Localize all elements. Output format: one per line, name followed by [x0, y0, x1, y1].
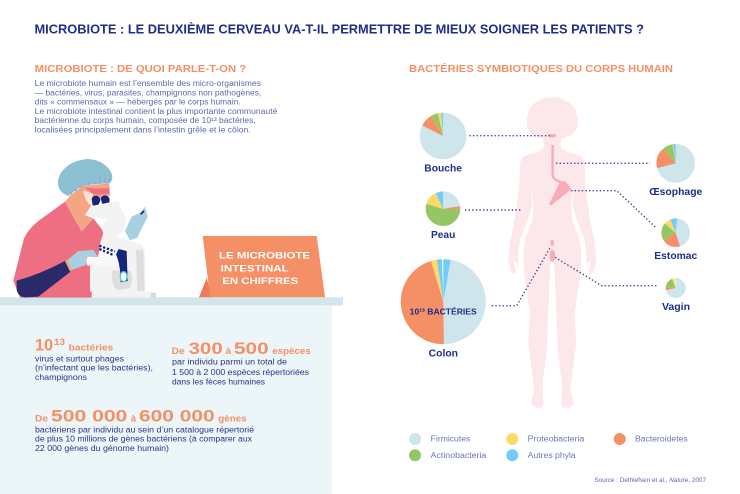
stat: 500 000 à 600 000 gènes: De: [35, 414, 48, 425]
panel: chiffres background: [0, 305, 332, 494]
pie: estomac: [669, 226, 683, 240]
pipette: [141, 211, 144, 214]
stat: 500 000 à 600 000 gènes: 500 000: [51, 407, 127, 426]
microscope arm: [116, 249, 128, 282]
connector: oesophage: [556, 162, 650, 164]
label: vagin: Vagin: [662, 302, 690, 313]
legend: Actinobacteria: [431, 451, 487, 460]
connector: bouche: [469, 135, 550, 137]
stat: 500 000 à 600 000 gènes: 22 000 gènes du génome humain): [35, 444, 169, 453]
stat: 300 à 500 espèces: 500: [234, 339, 269, 358]
colon annotation: 10¹³ BACTÉRIES: [410, 307, 477, 317]
label: bouche: Bouche: [424, 164, 462, 175]
sign: le microbiote en chiffres: EN CHIFFRES: [222, 276, 298, 287]
sign: le microbiote en chiffres: [199, 236, 325, 297]
surgical cap: [58, 159, 112, 196]
stat: 10^13 bactéries: 13: [54, 337, 65, 348]
pie: vagin: [671, 283, 681, 293]
text block: introduction: bactérienne du corps humain, composée de 10¹³ bactéries,: [35, 116, 256, 125]
neck and face: [65, 183, 110, 232]
pie: oesophage: [666, 154, 685, 173]
stat: 300 à 500 espèces: De: [172, 346, 185, 357]
scrubs: [13, 202, 105, 298]
stat: 10^13 bactéries: [35, 336, 153, 382]
cap gathers: [70, 177, 109, 194]
objectives: [99, 246, 115, 255]
sleeve: [17, 261, 71, 297]
stat: 300 à 500 espèces: 1 500 à 2 000 espèces répertoriées: [172, 368, 309, 377]
goggles strap: [85, 188, 109, 195]
stat: 10^13 bactéries: champignons: [35, 373, 87, 382]
label: oesophage: Œsophage: [649, 187, 703, 198]
microscope base: [92, 292, 151, 298]
pie: colon: [422, 280, 465, 323]
connector: estomac: [571, 191, 657, 228]
stat: 10^13 bactéries: (n’infectant que les bactéries),: [35, 364, 153, 373]
stat: 300 à 500 espèces: dans les fèces humaines: [172, 377, 265, 386]
legend: Firmicutes: [431, 435, 470, 444]
text block: introduction: dits « commensaux » — hébergés par le corps humain.: [35, 98, 241, 106]
glove upper: [125, 207, 148, 240]
legend: [409, 433, 688, 461]
stat: 300 à 500 espèces: espèces: [272, 346, 311, 357]
label: colon: Colon: [429, 349, 458, 360]
sign: le microbiote en chiffres: INTESTINAL: [221, 264, 289, 275]
legend: Autres phyla: [528, 451, 576, 460]
stat: 300 à 500 espèces: [172, 339, 311, 386]
label: estomac: Estomac: [654, 251, 698, 262]
stat: 500 000 à 600 000 gènes: de plus 10 millions de gènes bactériens (à comparer aux: [35, 435, 252, 444]
sign: le microbiote en chiffres: LE MICROBIOTE: [219, 251, 310, 262]
text block: introduction: Le microbiote intestinal contient la plus importante communauté: [35, 107, 278, 116]
stat: 500 000 à 600 000 gènes: 600 000: [139, 407, 215, 426]
connector: vagin: [555, 257, 658, 286]
stat: 500 000 à 600 000 gènes: [35, 407, 255, 453]
legend: Bacteroidetes: [635, 435, 688, 444]
text block: introduction: localisées principalement dans l’intestin grêle et le côlon.: [35, 125, 251, 134]
stat: 10^13 bactéries: bactéries: [69, 343, 113, 354]
organs: [548, 134, 572, 262]
heading: de quoi parle-t-on: MICROBIOTE : DE QUOI PARLE-T-ON ?: [35, 63, 246, 75]
microscope body: [85, 201, 145, 292]
cuff: [65, 260, 72, 272]
table top: [0, 297, 343, 305]
goggles lens: [83, 190, 93, 206]
stat: 500 000 à 600 000 gènes: à: [131, 414, 137, 425]
microscope eyepieces: [92, 195, 110, 208]
text block: introduction: — bactéries, virus, parasites, champignons non pathogènes,: [35, 88, 261, 97]
stat: 10^13 bactéries: virus et surtout phages: [35, 354, 124, 363]
glove lower: [67, 250, 97, 270]
title: MICROBIOTE : LE DEUXIÈME CERVEAU VA-T-IL PERMETTRE DE MIEUX SOIGNER LES PATIENTS ?: [34, 22, 644, 36]
label: peau: Peau: [431, 230, 455, 241]
human body silhouette: [508, 97, 596, 408]
stat: 300 à 500 espèces: par individu parmi un total de: [172, 357, 288, 366]
knob: [120, 272, 127, 282]
stat: 10^13 bactéries: 10: [35, 336, 53, 355]
connector: peau: [465, 209, 522, 211]
microscope shadow: [136, 249, 145, 291]
stat: 300 à 500 espèces: 300: [189, 339, 223, 358]
stat: 300 à 500 espèces: à: [226, 346, 232, 357]
illustration: scientist at microscope: [13, 159, 156, 298]
pie: peau: [434, 200, 452, 217]
connector: colon: [492, 247, 551, 306]
stat: 500 000 à 600 000 gènes: gènes: [218, 414, 247, 425]
stat: 500 000 à 600 000 gènes: bactériens par individu au sein d’un catalogue répertorié: [35, 425, 255, 434]
heading: bactéries symbiotiques: BACTÉRIES SYMBIOTIQUES DU CORPS HUMAIN: [409, 62, 673, 75]
legend: Proteobacteria: [528, 435, 585, 444]
text block: introduction: Le microbiote humain est l’ensemble des micro-organismes: [35, 79, 261, 88]
text block: introduction: [35, 79, 278, 134]
source: Source : Dethlefsen et al., Nature, 2007: [594, 478, 707, 484]
pie: bouche: [431, 124, 455, 148]
microscope stage: [86, 257, 124, 266]
